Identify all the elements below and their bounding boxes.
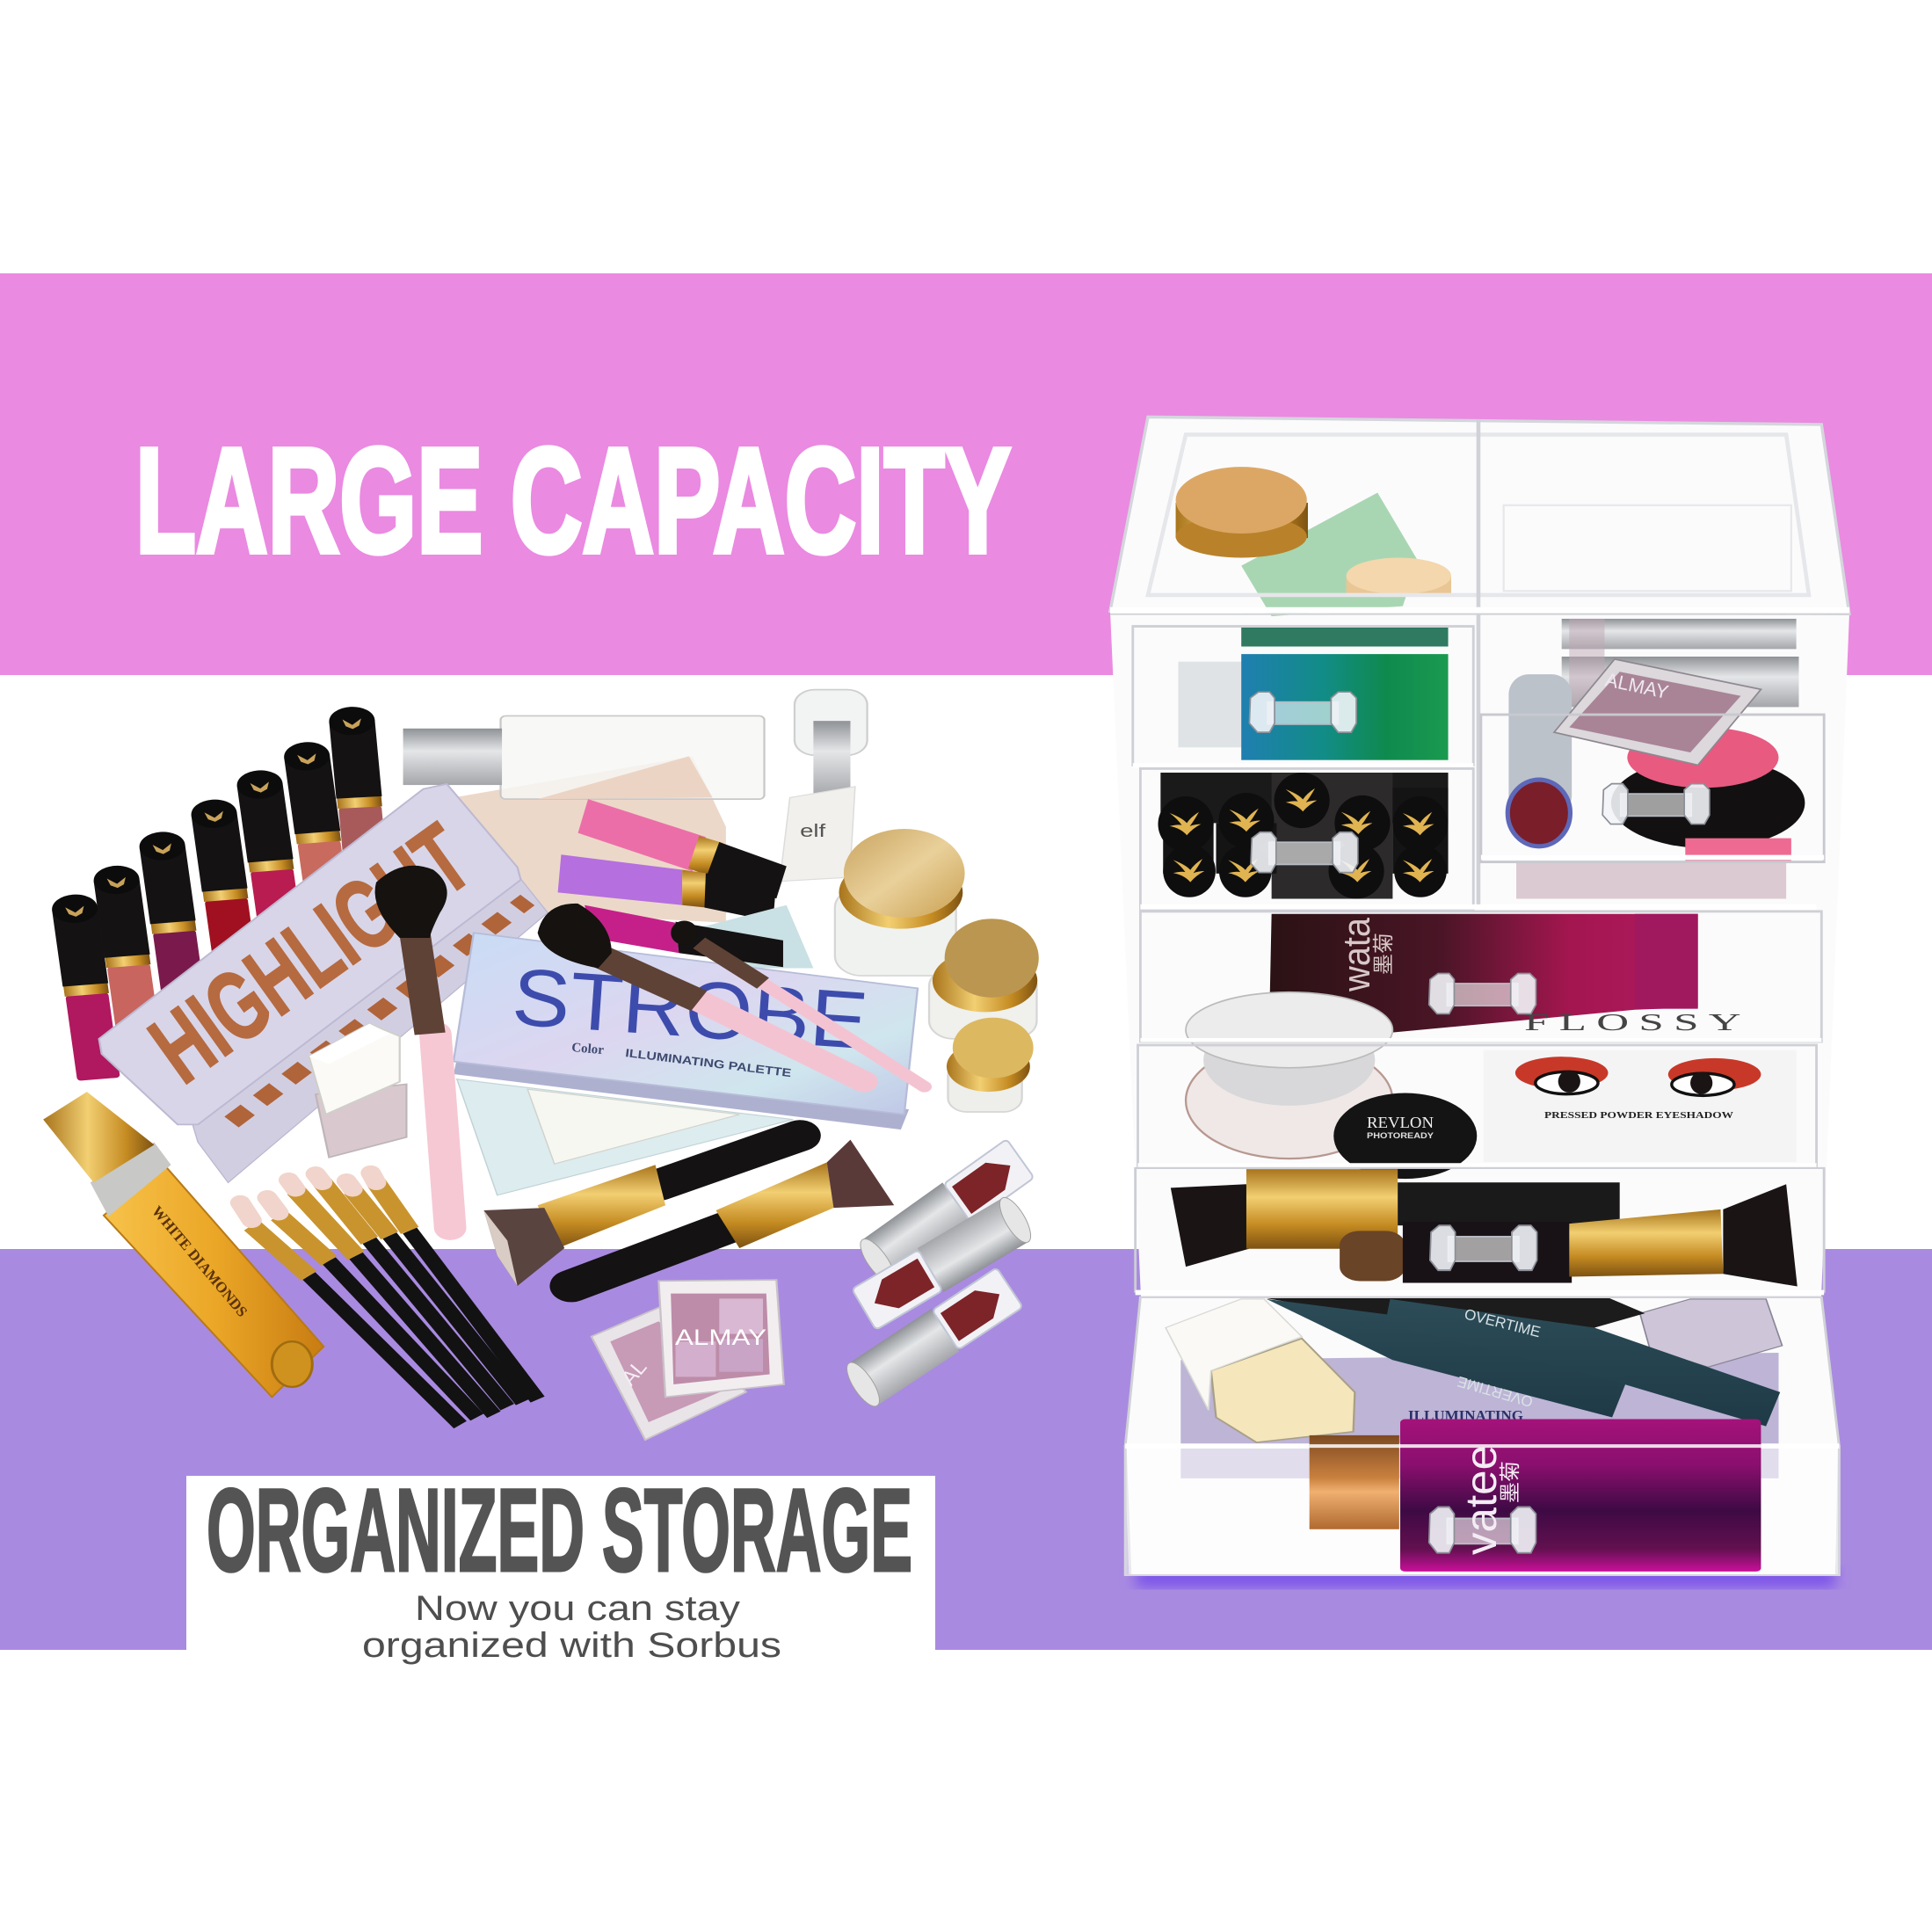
purple lip gloss	[558, 854, 776, 922]
silver lipstick upright	[1507, 674, 1572, 846]
palette lettering: illuminating palette: ILLUMINATING PALETTE	[625, 1046, 792, 1079]
lettering: overtime inverted: OVERTIME	[1456, 1373, 1535, 1410]
cream nail polish	[1166, 1299, 1355, 1442]
lettering: revlon: REVLON	[1367, 1114, 1434, 1131]
cherry lipstick three	[841, 1266, 1024, 1411]
products: back layer of flat-lay	[50, 690, 1039, 1182]
drawer handle five	[1430, 1225, 1537, 1270]
lettering: pressed powder eyeshadow: PRESSED POWDER EYESHADOW	[1544, 1110, 1733, 1121]
flat foundation brush top	[483, 1136, 800, 1286]
brush drawer frame	[1136, 1168, 1824, 1292]
title: large capacity: LARGE CAPACITY	[135, 418, 1011, 585]
bottom drawer frame	[1125, 1297, 1839, 1575]
holographic palette	[1180, 1353, 1779, 1478]
lilac nail polish	[1640, 1299, 1783, 1367]
organizer glow	[1136, 1566, 1835, 1587]
clear perfume bottle	[403, 715, 765, 799]
drawer handle three	[1602, 784, 1710, 824]
gold jar	[1176, 467, 1308, 557]
flat foundation brush bottom	[571, 1140, 894, 1286]
green tube	[1241, 492, 1418, 616]
drawer front highlight across bottle	[1310, 1442, 1761, 1450]
highlight palette tins	[99, 784, 548, 1182]
black items behind mascara	[1267, 1298, 1645, 1327]
tube lettering: chinese brand: 墨菊	[1372, 933, 1396, 975]
lettering: overtime: OVERTIME	[1463, 1305, 1542, 1340]
cherry lipstick one	[854, 1137, 1035, 1287]
callout heading: ORGANIZED STORAGE	[207, 1465, 912, 1596]
eye brush set	[240, 1173, 538, 1425]
tube lettering: wata: wata	[1335, 918, 1378, 992]
almay compact back	[592, 1306, 746, 1440]
drawer wide third	[1140, 912, 1821, 1042]
lettering: illuminating on holo palette: ILLUMINATING	[1408, 1407, 1523, 1424]
lettering: photoready: PHOTOREADY	[1367, 1131, 1434, 1140]
drawer handle six	[1429, 1507, 1536, 1553]
cherry lipstick two	[851, 1193, 1036, 1332]
acrylic organizer body	[1110, 417, 1849, 1575]
large powder brush	[375, 866, 450, 1228]
palette lettering: color: Color	[571, 1041, 605, 1057]
pale strip under drawer	[1516, 861, 1786, 899]
compact label: almay: ALMAY	[675, 1326, 766, 1350]
purple band	[0, 1249, 1932, 1650]
products: front layer	[43, 866, 925, 1440]
lettering: almay on drawer compact: ALMAY	[1603, 668, 1671, 703]
lettering: flossy: FLOSSY	[1524, 1009, 1751, 1035]
large flat brush lower	[1340, 1184, 1798, 1287]
organizer: upper section contents	[1158, 467, 1805, 1042]
blush compact	[1611, 727, 1805, 861]
lip gloss set	[50, 706, 391, 1081]
callout panel: organized storage	[186, 1465, 935, 1650]
organizer: bottom drawers contents	[1166, 1169, 1798, 1478]
stacked books	[457, 1079, 793, 1195]
bottle lettering: chinese brand: 墨菊	[1499, 1461, 1522, 1503]
strobe palette	[454, 933, 918, 1129]
drawer small left bottom	[1140, 768, 1817, 910]
rose gold bottle cap	[1310, 1435, 1399, 1529]
callout text block: Now you can stay	[415, 1589, 740, 1628]
mascara one	[1267, 1299, 1626, 1417]
gold lid jars	[835, 829, 1039, 1112]
silver lipsticks background	[1562, 619, 1798, 707]
drawer wide fourth	[1138, 1045, 1817, 1166]
teal book behind	[699, 905, 813, 968]
acrylic frame lines: upper	[1110, 417, 1849, 1166]
cream jar lid	[1347, 557, 1451, 596]
almay compact in drawer	[1554, 659, 1761, 765]
palette lettering: strobe: STROBE	[510, 952, 871, 1066]
amber perfume bottle	[43, 1092, 323, 1397]
purple bottle	[1400, 1420, 1761, 1572]
rose gold fan palette	[454, 756, 726, 923]
large flat brush upper	[1171, 1169, 1620, 1267]
palette lettering: highlight: HIGHLIGHT	[131, 803, 490, 1104]
drawer small left top	[1133, 627, 1473, 766]
revlon powder	[1333, 1093, 1477, 1179]
compact label: partial almay: AL	[617, 1355, 651, 1391]
products: middle layer	[454, 933, 918, 1195]
pink band	[0, 273, 1932, 675]
almay compact front	[658, 1280, 784, 1397]
pink lip gloss	[578, 799, 787, 898]
nail polish bottle	[309, 1024, 406, 1158]
acrylic frame lines: lower	[1125, 1168, 1839, 1575]
acrylic lid panel	[1110, 417, 1849, 909]
mascara two	[1385, 1299, 1780, 1427]
callout text block	[362, 1589, 781, 1665]
glass jar	[1186, 992, 1392, 1158]
organizer: lower contents	[1186, 992, 1797, 1179]
wata tube	[1269, 914, 1698, 1042]
magenta lip gloss	[585, 905, 783, 967]
pink small brush	[671, 920, 925, 1086]
eyeshadow card	[1484, 1050, 1797, 1162]
black lip gloss caps	[1158, 773, 1449, 899]
elf primer bottle: elf	[800, 821, 825, 841]
drawer large right	[1481, 715, 1824, 862]
stacked drawers back: teal bottles	[1178, 627, 1449, 760]
callout text block: organized with Sorbus	[362, 1626, 781, 1665]
drawer handle one	[1249, 692, 1356, 732]
elf primer bottle	[780, 690, 868, 882]
perfume label: white diamonds: WHITE DIAMONDS	[149, 1202, 251, 1320]
pink blush brush	[538, 904, 864, 1082]
bottle lettering: vatee: vatee	[1456, 1445, 1506, 1555]
drawer handle two	[1251, 832, 1358, 873]
drawer handle four	[1429, 973, 1536, 1013]
